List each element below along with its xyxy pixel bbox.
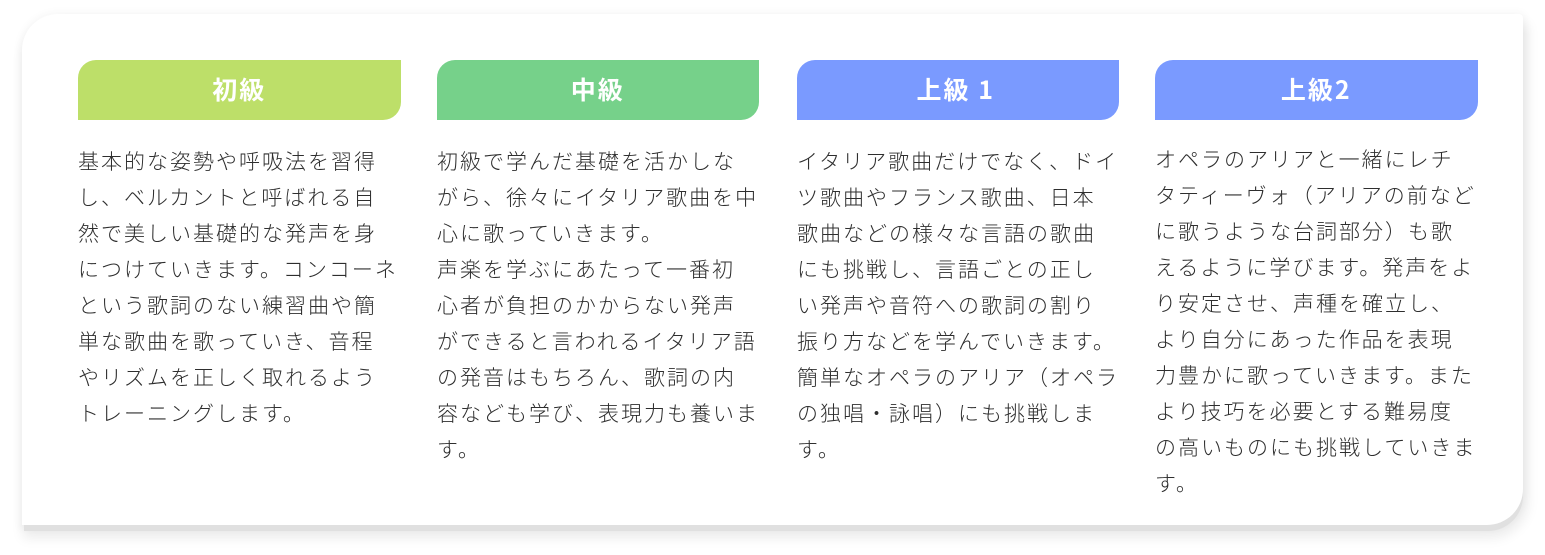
text block: 初級 description: 基本的な姿勢や呼吸法を習得 し、ベルカントと呼ばれる自 然で美しい基礎的な発声を身 につけていきます。コンコーネ という歌詞のない練習曲や簡 単な歌曲を歌っていき、音程 やリズムを正しく取れるよう トレーニングします。: [78, 151, 398, 426]
text block: 中級 description: 初級で学んだ基礎を活かしな がら、徐々にイタリア歌曲を中 心に歌っていきます。 声楽を学ぶにあたって一番初 心者が負担のかからない発声 ができると言われるイタリア語 の発音はもちろん、歌詞の内 容なども学び、表現力も養いま す。: [437, 151, 759, 462]
heading: 初級: 初級: [212, 71, 266, 107]
heading: 初級: [78, 60, 400, 120]
heading: 中級: 中級: [571, 71, 625, 107]
heading: 上級1: [796, 60, 1119, 120]
heading: 上級2: 上級2: [1281, 71, 1352, 107]
text block: 上級2 description: オペラのアリアと一緒にレチ タティーヴォ（アリアの前など に歌うような台詞部分）も歌 えるように学びます。発声をよ り安定させ、声種を確立し、 より自分にあった作品を表現 力豊かに歌っていきます。また より技巧を必要とする難易度 の高いものにも挑戦していきま す。: [1155, 149, 1476, 496]
text block: 上級1 description: イタリア歌曲だけでなく、ドイ ツ歌曲やフランス歌曲、日本 歌曲などの様々な言語の歌曲 にも挑戦し、言語ごとの正し い発声や音符への歌詞の割り 振り方などを学んでいきます。 簡単なオペラのアリア（オペラ の独唱・詠唱）にも挑戦しま す。: [797, 151, 1119, 462]
heading: 上級2: [1155, 60, 1478, 120]
heading: 上級1: 上級 1: [917, 71, 995, 107]
heading: 中級: [436, 60, 759, 120]
